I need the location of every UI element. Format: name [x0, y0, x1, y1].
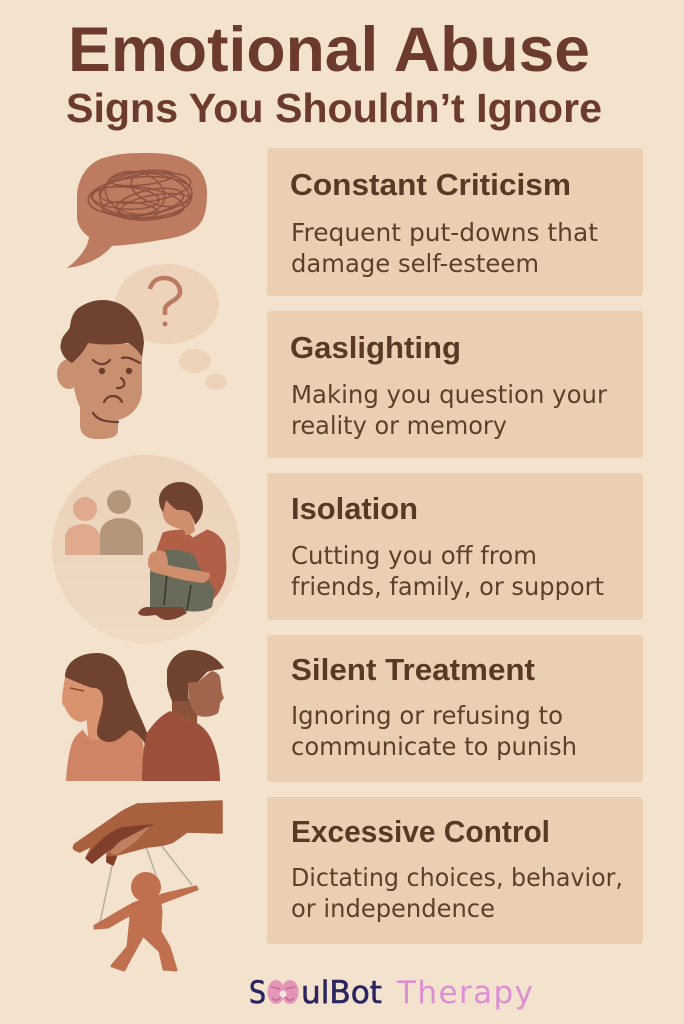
panel: constant criticism: damage self-esteem — [291, 249, 539, 278]
icon: speech bubble with scribble — [67, 153, 207, 268]
panel: gaslighting: reality or memory — [291, 411, 507, 440]
panel: excessive control: or independence — [291, 894, 495, 923]
panel: isolation — [267, 473, 643, 620]
panel: silent treatment: Silent Treatment — [291, 652, 535, 687]
icon: couple back to back — [62, 650, 224, 781]
panel: silent treatment: Ignoring or refusing to — [291, 701, 563, 730]
logo: SoulBot Therapy: ulBot — [301, 975, 382, 1011]
panel: gaslighting: Making you question your — [291, 380, 608, 409]
logo: SoulBot Therapy — [249, 975, 533, 1011]
panel: constant criticism: Frequent put-downs that — [291, 218, 598, 247]
panel: isolation: Cutting you off from — [291, 541, 537, 570]
panel: excessive control: Excessive Control — [291, 814, 550, 849]
logo: SoulBot Therapy: Therapy — [396, 975, 533, 1011]
subtitle: Signs You Shouldn’t Ignore — [66, 85, 602, 131]
icon: isolated person in circle — [52, 455, 240, 643]
panel: constant criticism: Constant Criticism — [290, 167, 571, 202]
panel: silent treatment — [267, 635, 643, 782]
icon: hand controlling puppet — [73, 801, 222, 970]
panel: silent treatment: communicate to punish — [291, 732, 577, 761]
panel: gaslighting: Gaslighting — [290, 330, 461, 365]
icon: confused head with thought bubble — [57, 264, 227, 439]
panel: constant criticism — [267, 148, 643, 296]
icon: brain — [268, 980, 298, 1004]
logo: SoulBot Therapy: S — [249, 975, 266, 1011]
panel: excessive control — [267, 797, 643, 944]
title: Emotional Abuse — [68, 15, 590, 85]
panel: excessive control: Dictating choices, behavior, — [291, 863, 623, 892]
panel: isolation: friends, family, or support — [291, 572, 604, 601]
panel: gaslighting — [267, 311, 643, 458]
panel: isolation: Isolation — [291, 491, 418, 526]
